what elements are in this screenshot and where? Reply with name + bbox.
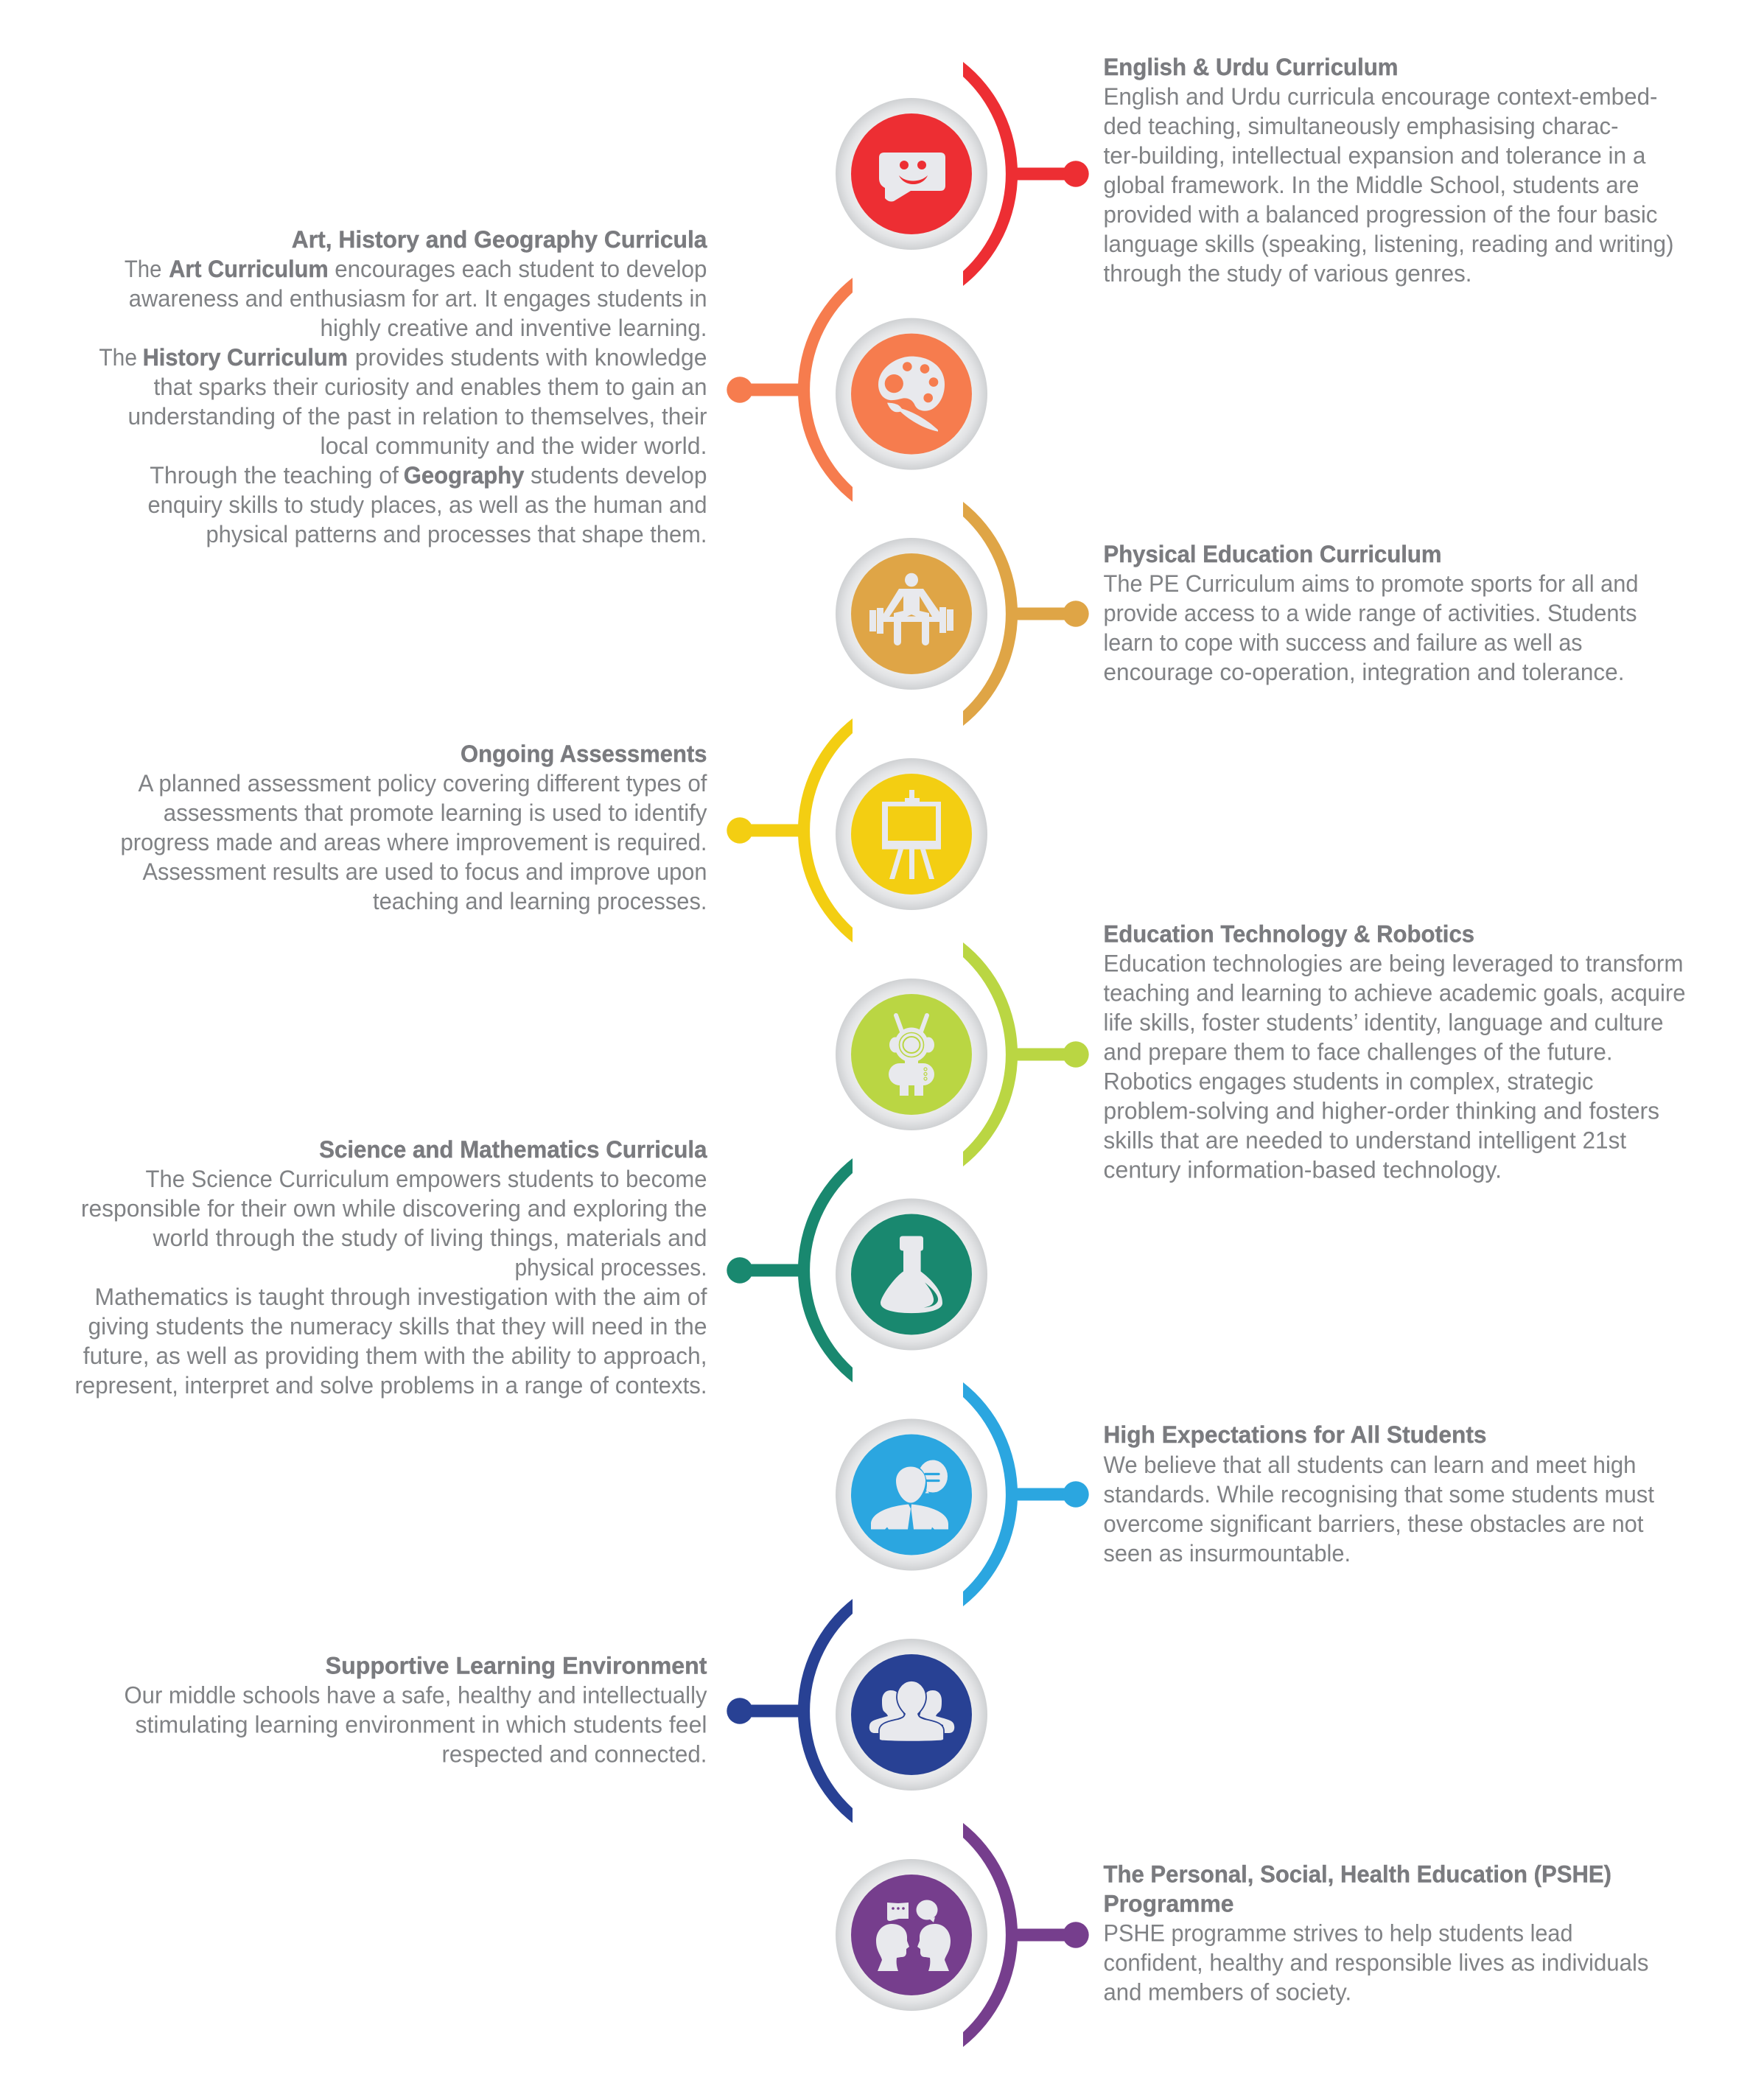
heading and text	[1104, 1421, 1654, 1567]
heading and text: century information-based technology.	[1104, 1157, 1502, 1183]
heading and text: awareness and enthusiasm for art. It engages students in	[129, 285, 707, 312]
heading and text: Education Technology & Robotics	[1104, 921, 1474, 948]
icon: two heads talking	[836, 1859, 987, 2011]
heading and text	[1104, 921, 1686, 1183]
heading and text	[1104, 541, 1639, 685]
heading and text: Mathematics is taught through investigation with the aim of	[94, 1284, 707, 1310]
heading and text: life skills, foster students’ identity, language and culture	[1104, 1009, 1664, 1036]
heading and text: provides students with knowledge	[355, 344, 707, 371]
heading and text: physical patterns and processes that shape them.	[206, 521, 707, 547]
heading and text: responsible for their own while discovering and exploring the	[81, 1195, 707, 1222]
connector	[727, 377, 802, 403]
heading and text: The Personal, Social, Health Education (PSHE)	[1104, 1861, 1611, 1888]
heading and text: represent, interpret and solve problems in a range of contexts.	[75, 1372, 707, 1399]
heading and text: Education technologies are being leveraged to transform	[1104, 951, 1683, 977]
icon: flask	[836, 1198, 987, 1350]
heading and text: teaching and learning processes.	[373, 888, 707, 914]
heading and text: Assessment results are used to focus and improve upon	[143, 858, 707, 885]
heading and text: The PE Curriculum aims to promote sports for all and	[1104, 570, 1639, 597]
icon: robot	[836, 979, 987, 1130]
arc	[798, 1158, 853, 1382]
heading and text: and members of society.	[1104, 1979, 1351, 2006]
heading and text: overcome significant barriers, these obstacles are not	[1104, 1511, 1644, 1537]
connector	[1013, 601, 1089, 627]
arc	[963, 502, 1018, 726]
heading and text: problem-solving and higher-order thinking and fosters	[1104, 1098, 1659, 1124]
heading and text: Science and Mathematics Curricula	[319, 1136, 707, 1163]
connector	[727, 817, 802, 844]
heading and text: stimulating learning environment in which students feel	[136, 1711, 707, 1737]
heading and text: confident, healthy and responsible lives as individuals	[1104, 1950, 1649, 1976]
heading and text: encourages each student to develop	[335, 256, 707, 282]
heading and text: physical processes.	[514, 1254, 707, 1281]
connector	[727, 1698, 802, 1724]
heading and text: teaching and learning to achieve academic goals, acquire	[1104, 980, 1686, 1007]
heading and text: highly creative and inventive learning.	[320, 315, 707, 341]
heading and text: English and Urdu curricula encourage context-embed-	[1104, 83, 1658, 110]
connector	[1013, 1481, 1089, 1508]
heading and text	[99, 226, 707, 547]
arc	[798, 278, 853, 502]
heading and text: global framework. In the Middle School, students are	[1104, 172, 1639, 198]
section: Science and Mathematics Curricula	[75, 1136, 987, 1399]
heading and text: world through the study of living things, materials and	[153, 1225, 707, 1251]
connector	[1013, 161, 1089, 187]
arc	[798, 718, 853, 942]
heading and text: local community and the wider world.	[320, 433, 707, 459]
heading and text	[124, 1652, 707, 1767]
section: Art, History and Geography Curricula	[99, 226, 987, 547]
heading and text: language skills (speaking, listening, reading and writing)	[1104, 231, 1674, 257]
section: Ongoing Assessments	[121, 718, 987, 942]
arc	[798, 1599, 853, 1823]
icon: chat bubble with smile	[836, 98, 987, 250]
heading and text: PSHE programme strives to help students lead	[1104, 1920, 1572, 1947]
icon: weightlifter	[836, 538, 987, 690]
arc	[963, 1382, 1018, 1606]
arc	[963, 1823, 1018, 2047]
heading and text: The	[99, 344, 137, 371]
heading and text: The	[125, 256, 161, 282]
heading and text: provided with a balanced progression of the four basic	[1104, 201, 1658, 228]
heading and text: Through the teaching of	[150, 462, 399, 489]
connector	[1013, 1922, 1089, 1948]
heading and text: provide access to a wide range of activities. Students	[1104, 600, 1637, 626]
section: High Expectations for All Students	[836, 1382, 1654, 1606]
heading and text: Our middle schools have a safe, healthy and intellectually	[124, 1681, 707, 1708]
heading and text	[121, 741, 707, 914]
heading and text: that sparks their curiosity and enables them to gain an	[153, 374, 707, 400]
heading and text: understanding of the past in relation to themselves, their	[128, 403, 707, 430]
heading and text: ter-building, intellectual expansion and tolerance in a	[1104, 142, 1646, 169]
heading and text: A planned assessment policy covering different types of	[139, 770, 707, 797]
heading and text: Supportive Learning Environment	[326, 1652, 707, 1679]
heading and text	[1104, 1861, 1649, 2006]
heading and text: High Expectations for All Students	[1104, 1421, 1487, 1448]
heading and text: English & Urdu Curriculum	[1104, 54, 1399, 80]
section: Education Technology & Robotics	[836, 921, 1686, 1183]
icon: easel	[836, 758, 987, 910]
arc	[963, 942, 1018, 1166]
icon: palette and brush	[836, 318, 987, 470]
heading and text: Ongoing Assessments	[461, 741, 707, 767]
heading and text: Geography	[404, 462, 525, 489]
heading and text: Art, History and Geography Curricula	[292, 226, 707, 253]
heading and text: through the study of various genres.	[1104, 260, 1472, 287]
icon: group of people	[836, 1639, 987, 1791]
heading and text: History Curriculum	[143, 344, 348, 371]
heading and text: Physical Education Curriculum	[1104, 541, 1441, 567]
heading and text: giving students the numeracy skills that they will need in the	[88, 1313, 707, 1340]
heading and text: skills that are needed to understand intelligent 21st	[1104, 1127, 1626, 1154]
arc	[963, 62, 1018, 286]
heading and text: future, as well as providing them with the ability to approach,	[83, 1343, 707, 1369]
heading and text: ded teaching, simultaneously emphasising charac-	[1104, 113, 1618, 139]
connector	[1013, 1041, 1089, 1068]
section: Physical Education Curriculum	[836, 502, 1639, 726]
icon: person with speech bubble	[836, 1419, 987, 1571]
heading and text: and prepare them to face challenges of the future.	[1104, 1039, 1612, 1065]
heading and text: Art Curriculum	[169, 256, 329, 282]
heading and text: encourage co-operation, integration and tolerance.	[1104, 659, 1624, 685]
section: English & Urdu Curriculum	[836, 54, 1674, 287]
heading and text: standards. While recognising that some students must	[1104, 1481, 1654, 1508]
section: Supportive Learning Environment	[124, 1599, 987, 1823]
heading and text: students develop	[531, 462, 707, 489]
heading and text: Robotics engages students in complex, strategic	[1104, 1068, 1593, 1095]
heading and text	[1104, 54, 1674, 287]
heading and text	[75, 1136, 707, 1399]
section: PSHE Programme	[836, 1823, 1649, 2047]
heading and text: assessments that promote learning is used to identify	[164, 799, 707, 826]
heading and text: respected and connected.	[442, 1740, 707, 1767]
heading and text: progress made and areas where improvement is required.	[121, 829, 707, 855]
connector	[727, 1257, 802, 1284]
heading and text: seen as insurmountable.	[1104, 1540, 1351, 1567]
heading and text: learn to cope with success and failure as well as	[1104, 629, 1583, 656]
heading and text: We believe that all students can learn and meet high	[1104, 1452, 1636, 1478]
heading and text: Programme	[1104, 1891, 1233, 1917]
heading and text: The Science Curriculum empowers students to become	[146, 1166, 707, 1192]
heading and text: enquiry skills to study places, as well as the human and	[147, 491, 707, 518]
